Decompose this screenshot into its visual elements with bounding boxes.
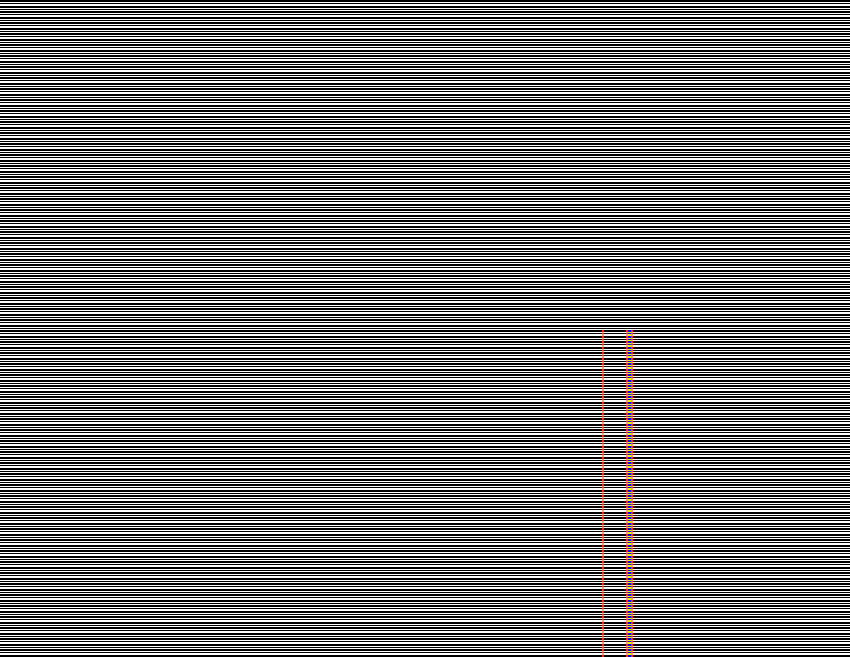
panel: upper striped field — [0, 0, 850, 329]
panel: lower striped field — [0, 330, 850, 657]
thick vertical line: right edge — [631, 330, 633, 657]
thick vertical line: left edge — [626, 330, 628, 657]
thick vertical line: core — [628, 330, 631, 657]
thin vertical line — [602, 330, 604, 657]
